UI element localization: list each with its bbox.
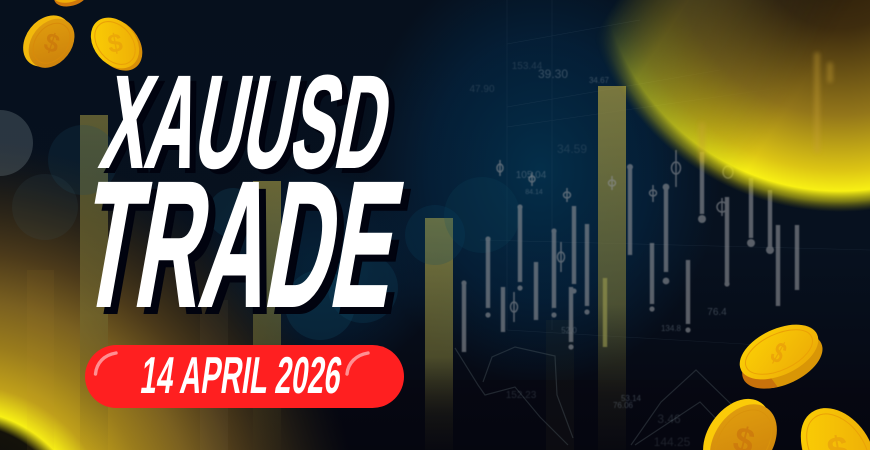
- title: TRADE: TRADE: [76, 152, 422, 352]
- date pill: 14 APRIL 2026: [137, 347, 345, 405]
- chart value labels: 152.23: [506, 390, 537, 401]
- chart value labels: 3.46: [657, 412, 681, 426]
- chart value labels: 144.25: [654, 435, 691, 449]
- coin: top right: $: [105, 27, 125, 59]
- chart value labels: [469, 61, 727, 449]
- chart value labels: 39.30: [538, 67, 568, 81]
- coin: top partial: [50, 0, 90, 12]
- chart value labels: 53.14: [621, 394, 642, 403]
- chart value labels: 76.4: [707, 307, 727, 318]
- coin: bottom large: $: [765, 337, 792, 371]
- title: XAUUSD: XAUUSD: [92, 49, 403, 196]
- title: TRADE: [69, 145, 422, 352]
- coin: bottom large: [730, 313, 831, 400]
- title: XAUUSD: XAUUSD: [98, 54, 409, 201]
- chart value labels: 153.44: [512, 61, 543, 72]
- chart value labels: 134.8: [661, 324, 682, 333]
- bokeh circles: [0, 110, 520, 340]
- gold vertical bars: [27, 86, 626, 450]
- date pill: [85, 345, 404, 408]
- chart value labels: 76.06: [613, 401, 634, 410]
- blurred candles over glow: [702, 55, 830, 160]
- candlestick chart: [461, 150, 797, 352]
- title: TRADE: TRADE: [69, 145, 415, 345]
- chart value labels: 105.04: [516, 170, 547, 181]
- chart value labels: 34.59: [557, 142, 587, 156]
- chart value labels: 52.0: [561, 326, 577, 335]
- grid lines: [480, 0, 870, 345]
- chart value labels: 34.67: [589, 76, 610, 85]
- chart value labels: 84.14: [525, 189, 543, 196]
- coin: top left: $: [40, 26, 64, 59]
- line charts: [455, 347, 732, 445]
- coin: top right: [81, 7, 152, 81]
- coin: top left: [13, 6, 84, 78]
- title: XAUUSD: [92, 49, 409, 201]
- top-right yellow glow: [604, 0, 870, 211]
- coin: bottom right: [790, 395, 870, 450]
- bottom-left yellow glow: [0, 0, 420, 450]
- chart value labels: 47.90: [469, 84, 495, 95]
- coin: bottom middle: [695, 390, 785, 450]
